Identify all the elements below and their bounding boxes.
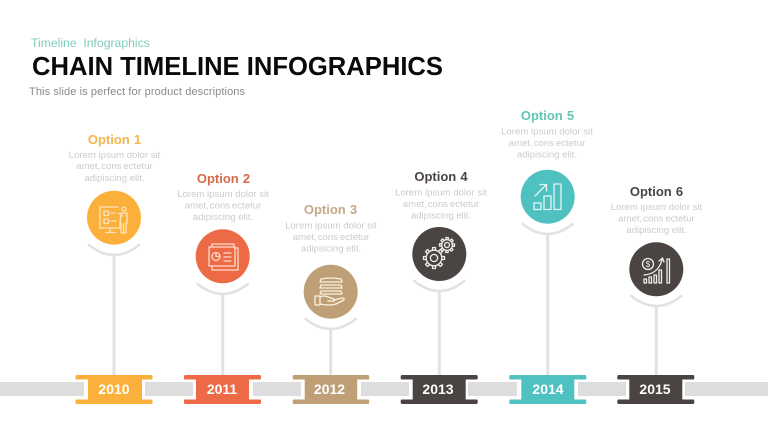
option 3 text: Lorem ipsum dolor sit: [285, 220, 377, 232]
year tag 2014: 2014: [532, 381, 564, 397]
option 5 text: amet, cons ectetur: [509, 138, 586, 149]
title: CHAIN TIMELINE INFOGRAPHICS: [32, 53, 443, 81]
option 1 text: Option 1: [88, 132, 141, 147]
year tag 2012: 2012: [314, 381, 345, 397]
option 3 text: Option 3: [304, 202, 357, 217]
option 3 text: amet, cons ectetur: [293, 232, 370, 243]
year tag 2013: [401, 375, 478, 404]
option 1 text: [69, 132, 161, 184]
year tag 2013: 2013: [422, 381, 454, 397]
option 5 text: [501, 108, 593, 160]
option 6 text: amet, cons ectetur: [618, 214, 696, 224]
year tag 2015: [617, 375, 694, 404]
year tag 2010: 2010: [98, 381, 130, 397]
option 2 text: amet, cons ectetur: [185, 200, 262, 212]
icon: presenter at board: [87, 191, 141, 245]
year tag 2010: [76, 375, 152, 404]
year tag 2012: [293, 375, 369, 404]
option 1 text: Lorem ipsum dolor sit: [69, 150, 161, 161]
option 2 text: [177, 171, 269, 223]
eyebrow text: Timeline Infographics: [31, 36, 150, 50]
icon: hand with stacked layers: [304, 265, 358, 319]
option 3 text: adipiscing elit.: [301, 244, 361, 254]
stems and arcs: [89, 224, 681, 375]
icon: dollar coin and rising bars: $: [646, 260, 651, 269]
icon: growth bars with arrow: [521, 170, 575, 224]
option 4 text: Lorem ipsum dolor sit: [395, 188, 487, 198]
option 4 text: Option 4: [414, 169, 468, 184]
option 5 text: Option 5: [521, 108, 574, 123]
icon: dollar coin and rising bars: [629, 242, 683, 296]
year tag 2011: 2011: [207, 381, 237, 397]
option 4 text: [395, 169, 487, 222]
option 2 text: Option 2: [197, 171, 250, 186]
subtitle: This slide is perfect for product descriptions: [29, 86, 246, 98]
option 2 text: Lorem ipsum dolor sit: [177, 189, 269, 200]
icon: presentation slides with pie: [196, 229, 250, 283]
year tag 2011: [184, 375, 261, 404]
option 6 text: adipiscing elit.: [626, 225, 687, 236]
option 4 text: amet, cons ectetur: [403, 199, 480, 210]
option 5 text: Lorem ipsum dolor sit: [501, 126, 593, 138]
option 2 text: adipiscing elit.: [193, 212, 253, 223]
option 1 text: adipiscing elit.: [84, 173, 145, 184]
option 6 text: [611, 184, 703, 236]
year tag 2014: [509, 375, 586, 404]
option 1 text: amet, cons ectetur: [76, 161, 154, 172]
option 4 text: adipiscing elit.: [411, 210, 471, 222]
header: [29, 36, 443, 98]
icon: gears: [412, 227, 466, 281]
option 6 text: Option 6: [630, 184, 683, 199]
option 5 text: adipiscing elit.: [517, 150, 577, 160]
option 3 text: [285, 202, 377, 254]
year tag 2015: 2015: [639, 381, 671, 397]
timeline bar: [0, 382, 768, 396]
option 6 text: Lorem ipsum dolor sit: [611, 202, 703, 213]
